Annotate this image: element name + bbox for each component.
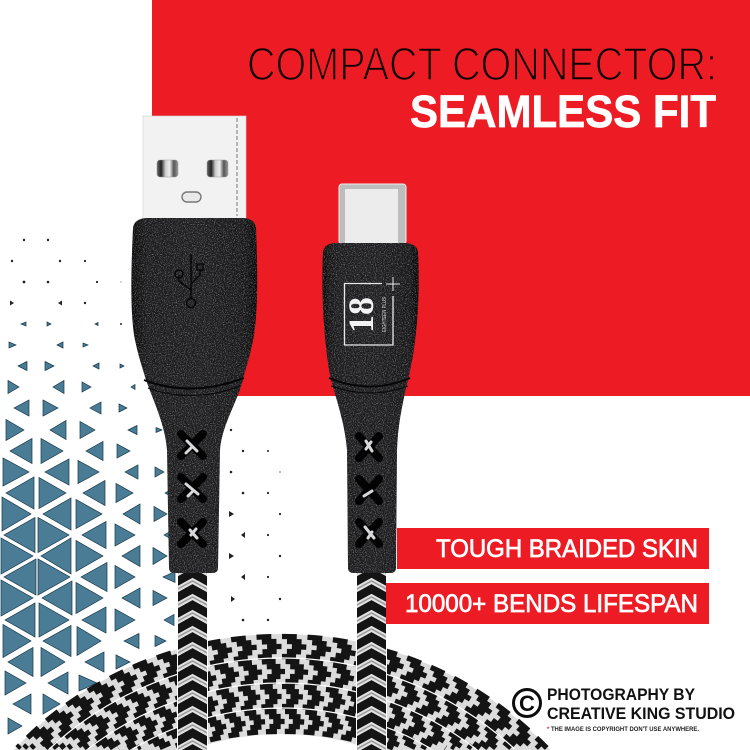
red panel	[152, 0, 750, 396]
metal plug	[143, 116, 246, 219]
metal tip	[339, 184, 406, 244]
USB rubber body	[131, 218, 257, 573]
credit line 1: PHOTOGRAPHY BY	[547, 686, 695, 704]
coiled braided cable	[14, 634, 550, 750]
logo: 18 Eighteen Plus	[341, 277, 400, 345]
icon: copyright mark	[514, 690, 540, 716]
USB-A cable	[177, 568, 208, 750]
callout: bends lifespan: 10000+ BENDS LIFESPAN	[405, 590, 698, 618]
Type-C strain-relief vents	[359, 436, 379, 544]
callout: bends lifespan	[386, 583, 709, 624]
Type-C cable	[356, 568, 387, 750]
USB-A connector	[131, 116, 257, 573]
callout: tough braided skin: TOUGH BRAIDED SKIN	[436, 535, 698, 563]
disclaimer: * THE IMAGE IS COPYRIGHT DON'T USE ANYWHERE.	[547, 726, 699, 733]
credit line 2: CREATIVE KING STUDIO	[547, 705, 735, 723]
icon: copyright mark: C	[519, 691, 535, 716]
USB strain-relief vents	[181, 434, 203, 544]
photography credit	[514, 686, 735, 733]
logo: 18 Eighteen Plus: EIGHTEEN PLUS	[382, 296, 388, 332]
title	[247, 38, 717, 137]
Type-C connector	[322, 184, 419, 573]
title line 2: SEAMLESS FIT	[410, 86, 716, 137]
triangle pattern	[1, 239, 281, 734]
callout: tough braided skin	[397, 528, 709, 569]
Type-C rubber body	[322, 243, 419, 573]
icon: USB trident	[175, 254, 203, 308]
logo: 18 Eighteen Plus: 18	[341, 297, 381, 333]
